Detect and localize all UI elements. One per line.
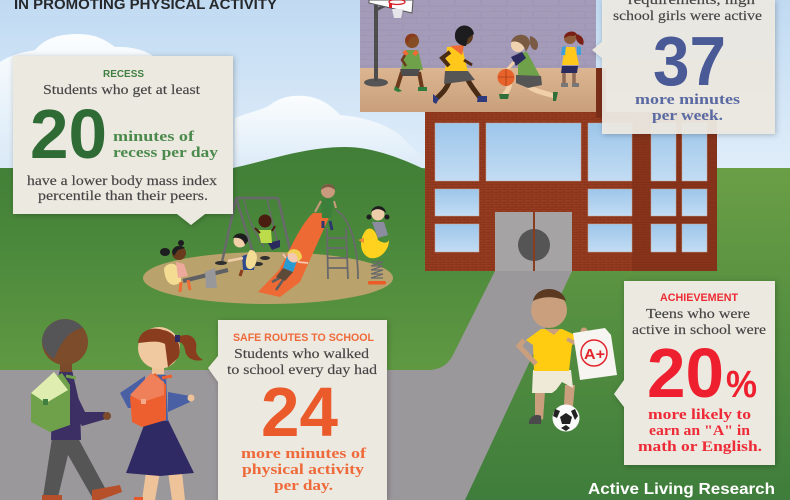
text: more minutes per week: more minutes [635,92,740,108]
sand oval [143,252,393,304]
player: girl with ball [498,35,558,101]
soccer ball [552,404,580,432]
playground [143,184,393,304]
number: 24: 24 [261,373,338,451]
children walking: girl [120,327,203,500]
text: more likely to earn an A: math or English. [638,439,762,455]
number: 20: 20 [30,95,107,173]
text: more minutes per week: per week. [652,108,723,124]
background sky [0,0,790,200]
swing set [215,198,290,266]
text: intro: Students who get at least [43,83,200,98]
player: standing girl [561,32,584,87]
basketball hoop [364,0,413,86]
text: intro: Teens who were [646,307,750,322]
child on seesaw right [228,233,257,276]
spring duck rider [358,206,390,284]
text: more minutes per week [635,92,740,124]
text: more minutes of physical activity: per day. [274,478,333,494]
brick walls [425,112,717,271]
panel: safe routes to school [208,320,387,500]
child on top of slide [315,184,336,230]
text: more minutes of physical activity: more minutes of [241,446,367,462]
windows [435,123,707,252]
head [531,292,567,328]
torso and arm [51,370,81,440]
report card [573,328,617,380]
heading: safe routes to school: SAFE ROUTES TO SCHOOL [233,332,374,344]
head [152,362,164,374]
school building [425,68,717,271]
player: small boy [394,34,427,92]
report card: A+ [584,346,605,363]
panel: recess [13,56,233,225]
number: 20 percent: 20 [647,334,724,412]
child on seesaw left [160,240,190,292]
shirt [526,329,582,371]
text: intro: active in school were [632,323,766,338]
text: intro [632,307,766,338]
text: intro: Students who walked [234,347,369,362]
player: tall boy [433,25,487,104]
text: minutes of recess per day: recess per day [113,145,219,161]
grass hills [0,147,790,500]
text: more likely to earn an A: more likely to [648,407,751,423]
head [42,319,88,365]
legs [535,385,575,420]
number: 20 percent: % [726,364,757,406]
text: intro: to school every day had [227,363,377,378]
heading: achievement: ACHIEVEMENT [660,292,738,304]
child on slide [272,249,308,290]
legs [43,438,105,497]
backpack [130,373,166,427]
text: outcome: percentile than their peers. [38,189,208,204]
text: more likely to earn an A [638,407,762,455]
shorts [532,370,573,393]
heading: recess: RECESS [103,68,144,80]
ponytail [178,335,203,361]
legs [142,472,185,500]
door [495,212,572,271]
text: minutes of recess per day [113,129,219,161]
number: 37: 37 [653,22,726,100]
torso and arm [146,375,168,421]
basketball court scene [360,0,596,112]
child on swing [255,214,280,250]
arms [519,340,536,364]
text: intro [227,347,377,378]
ladder [327,210,358,279]
children walking: boy [31,319,122,500]
seesaw [183,268,228,288]
text: more minutes of physical activity: physical activity [242,462,365,478]
text: more likely to earn an A: earn an "A" in [649,423,751,439]
boy with soccer ball and report card [519,289,617,432]
slide [258,213,331,297]
panel: achievement [614,281,775,465]
backpack [31,373,70,432]
text: outcome [27,174,217,204]
skirt [126,420,194,476]
text: outcome: have a lower body mass index [27,174,217,189]
road [0,271,572,500]
panel: physical education stat [592,0,775,134]
text: intro: school girls were active [613,9,762,24]
credit: active living research: Active Living Research [588,481,775,498]
clouds [0,34,440,175]
text: intro [613,0,762,24]
text: more minutes of physical activity [241,446,367,494]
text: minutes of recess per day: minutes of [113,129,195,145]
